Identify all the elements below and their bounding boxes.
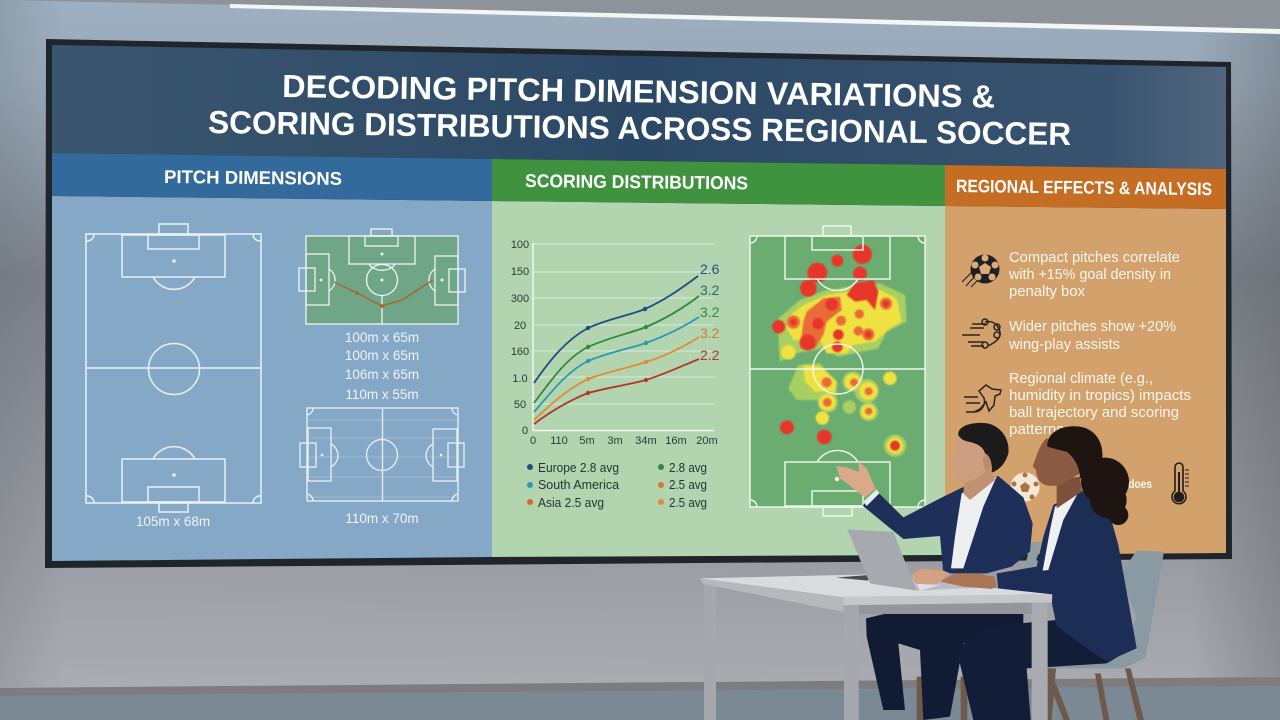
regional effects text: with +15% goal density in [1008,267,1171,283]
y axis labels: 300 [511,293,529,305]
dimension labels list: 100m x 65m [345,330,419,345]
line chart: scoring distribution [511,239,720,447]
regional effects text: ndoes [1122,477,1152,491]
desk and presenters [700,423,1164,720]
series: orange [534,337,699,420]
series end values: 3.2 [700,304,720,320]
desk left edge [700,578,843,612]
chart legend: Europe 2.8 avg [538,460,619,475]
y axis labels: 0 [522,425,528,437]
series: South America [534,317,699,412]
heatmap pitch [750,226,925,516]
dimension label: 105m x 68m: 105m x 68m [136,514,210,529]
panel: scoring distributions background [492,201,945,557]
y axis labels: 20 [514,320,526,332]
ear [983,454,992,470]
series: Europe [534,276,698,383]
neck [1057,477,1082,508]
jacket [997,490,1137,662]
regional effects text: penalty box [1009,284,1086,300]
regional effects text: Wider pitches show +20% [1009,319,1176,335]
pitch lines [750,226,925,516]
chart legend [527,460,707,510]
panel: regional effects background [945,206,1226,555]
desk top [700,574,1052,597]
header: scoring distributions band [492,159,945,206]
dimension labels list: 100m x 65m [345,348,419,363]
series: Asia [534,359,699,424]
title band [52,45,1226,169]
regional effects text: patterns [1009,422,1064,438]
dimension labels list [345,330,419,402]
x axis labels [530,435,718,447]
chart grid [533,243,714,431]
face [1033,438,1080,486]
man: trousers [866,610,1023,720]
x axis labels: 34m [635,435,657,447]
woman: trousers [957,620,1135,720]
heatmap blobs [772,245,907,457]
panel: pitch dimensions background [52,196,492,561]
hair [1047,426,1103,478]
pitch diagram: green horizontal [299,229,465,324]
neck [963,468,995,500]
regional effects text: ball trajectory and scoring [1009,405,1179,421]
x axis labels: 3m [607,435,623,447]
man [836,423,1033,573]
pitch surface [750,236,925,507]
pointing hand [836,462,876,497]
papers [836,575,868,581]
y axis labels: 160 [511,346,529,358]
heading: regional effects and analysis: REGIONAL EFFECTS & ANALYSIS [956,176,1212,199]
title [208,68,1071,152]
x axis labels: 0 [530,435,536,447]
series end values: 2.6 [700,261,720,277]
icon: small soccer ball [1010,472,1040,502]
hair bun [1081,458,1129,525]
play path [334,280,433,306]
display screen [45,39,1232,568]
x axis labels: 110 [550,435,568,447]
woman [940,426,1137,662]
desk legs back [704,582,967,720]
icon: wing play motion [962,319,1000,348]
pitch diagram: full size vertical [86,224,261,512]
chart legend: 2.5 avg [669,477,707,492]
series markers [586,307,648,395]
x axis labels: 5m [579,435,595,447]
chart legend: South America [538,477,620,492]
series end values: 3.2 [700,282,720,298]
dimension labels list: 106m x 65m [345,367,419,382]
desk [700,574,1052,720]
chair: woman [1015,551,1164,720]
heading: pitch dimensions: PITCH DIMENSIONS [164,166,342,189]
dimension label: 110m x 70m: 110m x 70m [345,511,419,526]
laptop [847,529,978,591]
screen bezel [45,39,1232,568]
title: SCORING DISTRIBUTIONS ACROSS REGIONAL SOCCER [208,104,1071,152]
face [950,433,990,482]
regional effects text: Compact pitches correlate [1009,250,1180,266]
icon: soccer ball with motion lines [962,254,1000,287]
regional effects text: humidity in tropics) impacts [1009,388,1191,404]
dimension labels list: 110m x 55m [345,387,419,402]
y axis labels: 150 [511,266,529,278]
desk legs front [844,605,859,720]
y axis labels: 50 [514,399,526,411]
title: DECODING PITCH DIMENSION VARIATIONS & [282,68,995,115]
y axis labels [511,239,529,437]
heading: scoring distributions: SCORING DISTRIBUTIONS [525,170,748,193]
chart legend: 2.5 avg [669,495,707,510]
chart legend: 2.8 avg [669,460,707,475]
cuff [863,489,879,506]
desk front edge [843,594,1052,605]
y axis labels: 100 [511,239,529,251]
pitch diagram: outline horizontal [300,408,464,501]
shirt [1043,489,1080,571]
x axis labels: 16m [665,435,687,447]
icon: boot and motion [964,385,1001,412]
hair [958,423,1009,473]
regional effects text [1008,250,1191,491]
hands on keyboard [911,568,950,584]
x axis labels: 20m [696,435,718,447]
chair behind man [1023,542,1042,570]
regional effects text: wing-play assists [1008,337,1120,353]
y axis labels: 1.0 [512,373,528,385]
jacket [863,476,1033,573]
header: pitch dimensions band [52,153,492,201]
series end values: 2.2 [700,347,720,363]
header: regional effects band [945,165,1226,209]
chart legend: Asia 2.5 avg [538,495,604,510]
regional effects text: Regional climate (e.g., [1009,371,1153,387]
series end values: 3.2 [700,325,720,341]
shirt [951,477,997,568]
series: green [534,296,699,403]
series end values [700,261,720,363]
hand [940,573,997,588]
icon: thermometer [1172,463,1189,504]
